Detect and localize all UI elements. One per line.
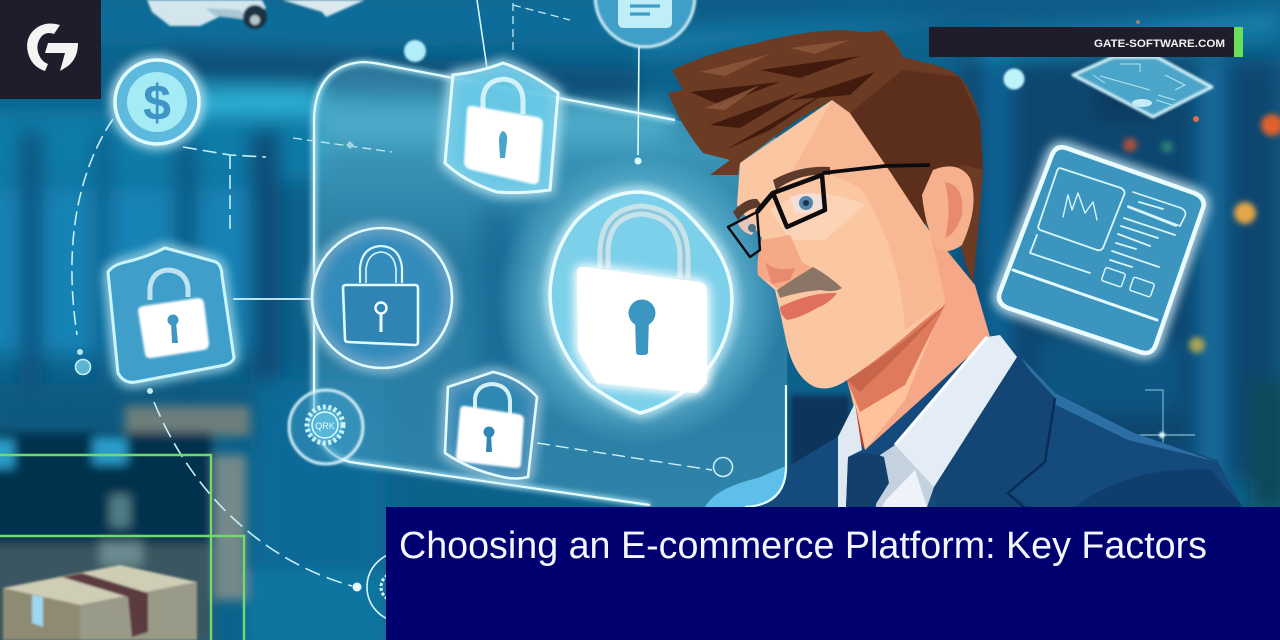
- green outline frames: [0, 455, 244, 640]
- shirt and collar: [838, 335, 1017, 507]
- right tablet hologram: [999, 147, 1204, 353]
- bottom shield lock: [445, 372, 537, 478]
- circle outline lock: [312, 228, 452, 368]
- panel dashed detail line: [293, 138, 392, 152]
- neck: [830, 230, 990, 450]
- logo mark: [27, 24, 78, 71]
- dashed connector arcs: [72, 119, 352, 586]
- brows: [733, 167, 830, 220]
- glass security panel: [314, 62, 790, 507]
- face: [737, 100, 945, 388]
- dollar coin icon: [115, 60, 199, 144]
- dollar coin icon: $: [143, 75, 171, 131]
- panel edge over suit: [745, 385, 786, 507]
- top shield lock: [445, 63, 558, 193]
- parcel box: [3, 565, 197, 640]
- suit jacket: [705, 337, 1243, 518]
- gear badge: QRK: [315, 421, 335, 431]
- large shield lock: [495, 155, 785, 445]
- website banner: GATE-SOFTWARE.COM: [1094, 38, 1225, 50]
- dashed link with ring: [537, 443, 732, 476]
- eyes: [737, 193, 823, 235]
- gear badge: [289, 390, 363, 464]
- small floating blueprint tablet: [1073, 57, 1212, 117]
- moustache: [777, 267, 842, 298]
- ear: [922, 166, 974, 251]
- man portrait: [668, 30, 1243, 518]
- necktie: [846, 453, 889, 507]
- left lock card: [108, 248, 314, 382]
- title block: Choosing an E-commerce Platform: Key Factors: [399, 525, 1207, 567]
- sparkle with bracket line: [1130, 390, 1195, 470]
- small node dots: [76, 40, 1024, 592]
- logo tile: [0, 0, 101, 99]
- hair: [668, 30, 983, 283]
- bottom gear node behind title: [367, 552, 437, 622]
- jaw shadow line: [847, 303, 947, 392]
- top connector lines and doc node: [477, 0, 695, 164]
- bokeh lights: [1123, 20, 1280, 353]
- robot device at top: [147, 0, 365, 29]
- website banner: [929, 27, 1243, 57]
- glasses: [728, 165, 930, 257]
- title block: [386, 507, 1280, 640]
- lips: [780, 293, 837, 320]
